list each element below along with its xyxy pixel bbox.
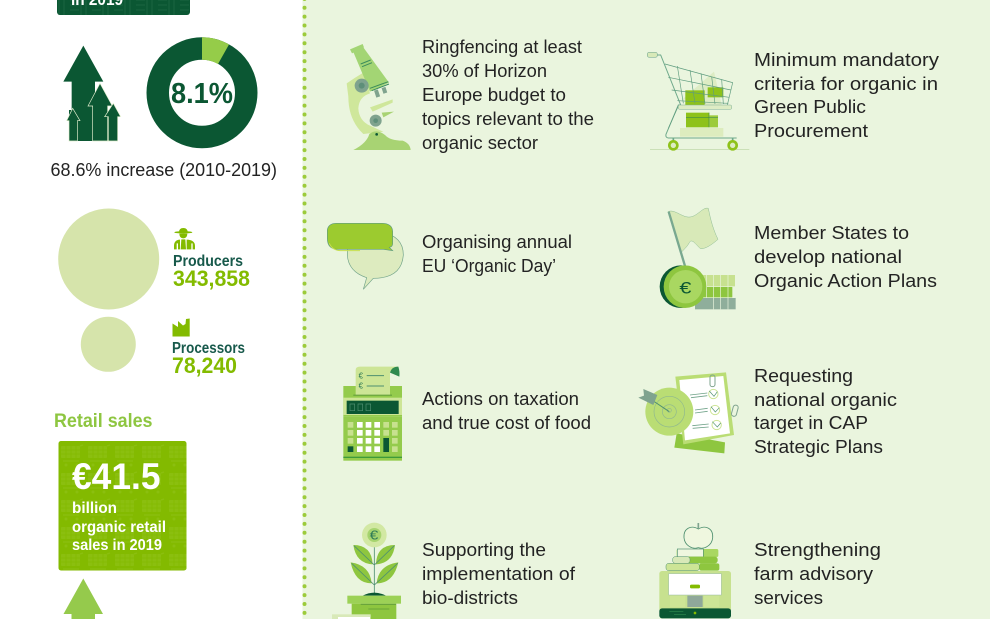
bubble: producers [58, 208, 159, 310]
icon: calculator [343, 367, 402, 461]
dotted divider [302, 0, 306, 615]
icon: speech bubbles [327, 223, 403, 289]
item: research budget: organic sector [422, 133, 538, 153]
icon: calculator: € [359, 382, 364, 391]
panel: retail sales stat: sales in 2019 [72, 537, 162, 554]
item: taxation: Actions on taxation [422, 389, 579, 409]
item: farm advisory: services [754, 588, 823, 608]
item: national action plans: develop national [754, 247, 902, 267]
item: bio-districts: implementation of [422, 564, 576, 584]
bubble: processors [81, 317, 136, 372]
icon: calculator: € [359, 372, 364, 381]
item: national target in CAP [638, 366, 897, 457]
producers stat: 343,858 [173, 266, 250, 291]
item: national action plans [660, 208, 937, 309]
donut chart: 8.1%: 8.1% [171, 78, 233, 110]
panel: retail sales stat: €41.5 [72, 456, 160, 497]
item: taxation [343, 367, 591, 461]
item: green public procurement: Minimum mandatory [754, 50, 939, 70]
item: bio-districts [332, 523, 576, 619]
item: green public procurement [647, 50, 939, 149]
icon: farmer [174, 228, 195, 249]
processors stat: Processors [172, 340, 245, 357]
producers stat: Producers [173, 253, 243, 270]
panel: retail sales stat: billion [72, 500, 117, 517]
item: farm advisory [659, 523, 881, 618]
heading: retail sales: Retail sales [54, 410, 153, 432]
panel: retail sales stat: organic retail [72, 519, 166, 536]
item: farm advisory: farm advisory [754, 564, 873, 584]
icon: factory [172, 318, 190, 336]
item: national target in CAP: Strategic Plans [754, 437, 883, 457]
item: organic day: Organising annual [422, 232, 572, 252]
item: taxation: and true cost of food [422, 413, 591, 433]
item: bio-districts: Supporting the [422, 540, 546, 560]
item: research budget: Ringfencing at least [422, 37, 582, 57]
icon: microscope [347, 44, 411, 150]
item: national target in CAP: target in CAP [754, 413, 868, 433]
increase caption: 68.6% increase (2010-2019) [50, 160, 277, 180]
icon: laptop, books and apple [659, 523, 731, 618]
item: national target in CAP: Requesting [754, 366, 853, 386]
icon: plant with coin [332, 523, 401, 619]
item: bio-districts: bio-districts [422, 588, 518, 608]
processors stat [172, 318, 245, 378]
panel: retail sales stat [58, 441, 186, 570]
icon: shopping cart [647, 52, 749, 149]
item: green public procurement: Procurement [754, 121, 868, 141]
item: national action plans: Member States to [754, 223, 909, 243]
item: organic day: EU ‘Organic Day’ [422, 256, 556, 276]
item: research budget [347, 37, 594, 153]
icon: retail growth arrow [64, 578, 103, 619]
icon: flag and coins [660, 208, 736, 309]
processors stat: 78,240 [172, 353, 237, 378]
item: national target in CAP: national organic [754, 390, 897, 410]
icon: flag and coins: € [679, 278, 692, 297]
icon: plant with coin: € [370, 529, 378, 543]
item: research budget: 30% of Horizon [422, 61, 547, 81]
producers stat [173, 228, 250, 291]
item: research budget: topics relevant to the [422, 109, 594, 129]
icon: growth arrows [63, 46, 121, 141]
item: organic day [327, 223, 572, 289]
item: green public procurement: criteria for organic in [754, 74, 938, 94]
item: farm advisory: Strengthening [754, 540, 881, 560]
donut chart: 8.1% [158, 37, 246, 137]
icon: target and checklist [638, 372, 739, 453]
item: national action plans: Organic Action Plans [754, 271, 937, 291]
panel: organic area top box [57, 0, 190, 15]
item: green public procurement: Green Public [754, 97, 866, 117]
right panel background [302, 0, 990, 619]
item: research budget: Europe budget to [422, 85, 566, 105]
